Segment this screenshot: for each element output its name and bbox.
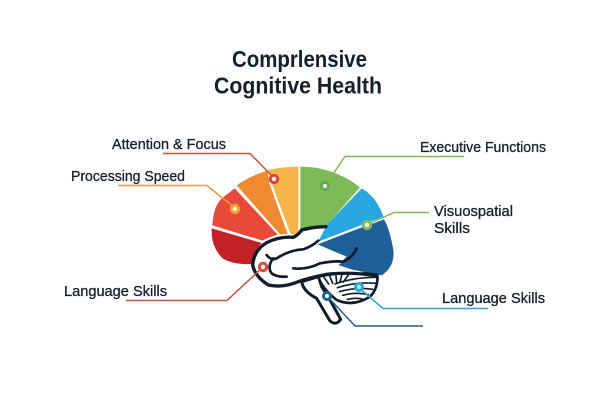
- cerebellum: [318, 273, 377, 303]
- marker: language left: [259, 263, 267, 271]
- brain segment: orange: [237, 171, 288, 234]
- white inner lobe: [253, 227, 377, 286]
- leader: visuospatial: [366, 212, 429, 225]
- label: visuospatial: Skills: [434, 220, 470, 237]
- title: Comprlensive: [232, 46, 367, 72]
- label: language left: Language Skills: [64, 283, 167, 300]
- label: executive: Executive Functions: [420, 139, 546, 156]
- title: Cognitive Health: [214, 72, 382, 98]
- brain segment: yellow: [268, 167, 298, 237]
- label: processing: Processing Speed: [71, 168, 185, 185]
- title: [214, 46, 382, 98]
- label: language right: Language Skills: [442, 290, 545, 307]
- divider: light blue to dark blue: [317, 225, 366, 244]
- brain segment: red-orange: [212, 188, 278, 241]
- marker: attention: [270, 175, 278, 183]
- leader: language right: [358, 287, 488, 308]
- label: visuospatial: Visuospatial: [434, 203, 513, 220]
- label: visuospatial: [434, 203, 513, 237]
- marker: language right: [356, 284, 362, 290]
- brain illustration: [212, 167, 394, 323]
- brain segment: dark blue: [317, 219, 394, 275]
- leader: processing: [118, 186, 235, 208]
- leader: attention: [163, 154, 274, 178]
- brain segment: light blue: [318, 188, 383, 242]
- brain segment: dark red: [212, 228, 262, 264]
- leader: blue: [327, 296, 423, 326]
- marker: blue: [324, 292, 330, 300]
- marker: visuospatial: [363, 221, 371, 229]
- leader: executive: [325, 156, 464, 186]
- line-art detail: [253, 227, 377, 323]
- brain stem: [302, 277, 341, 323]
- leader: language left: [126, 268, 262, 300]
- label: attention: Attention & Focus: [112, 136, 226, 153]
- brain segment: green: [300, 167, 360, 233]
- colored lobes: [212, 167, 394, 275]
- marker: processing: [231, 205, 239, 213]
- marker: executive: [322, 182, 328, 190]
